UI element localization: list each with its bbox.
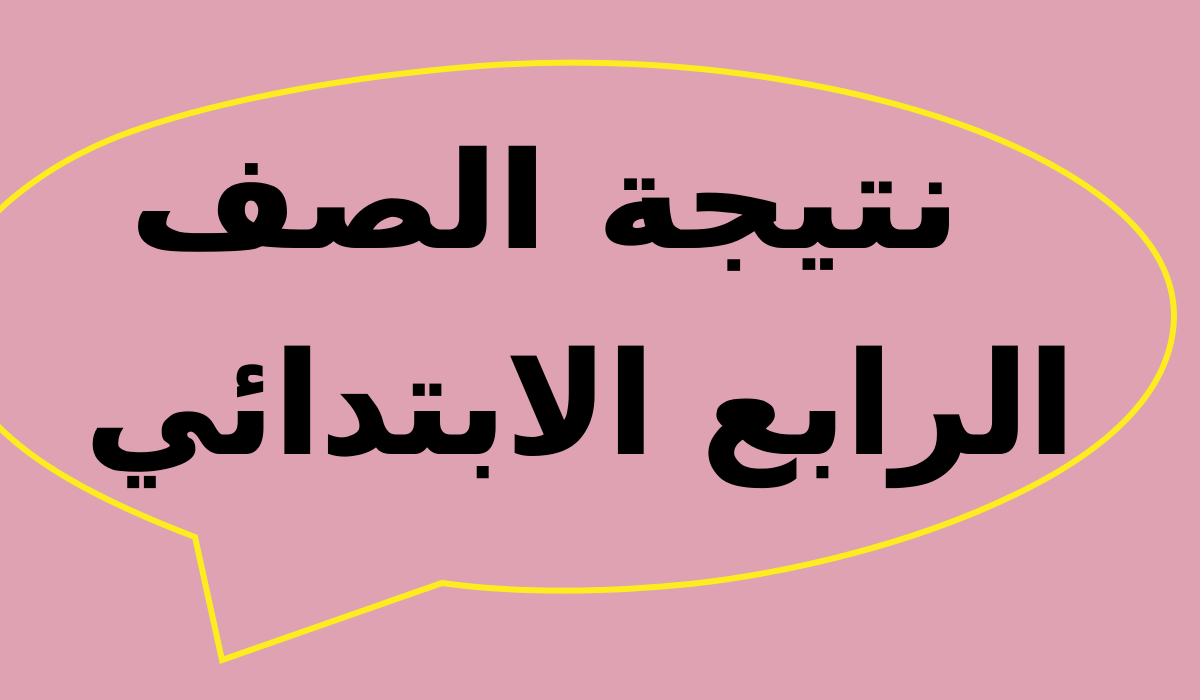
heading line 1: نتيجة الصف: [130, 125, 960, 279]
heading line 2: الرابع الابتدائي: [85, 324, 1075, 487]
